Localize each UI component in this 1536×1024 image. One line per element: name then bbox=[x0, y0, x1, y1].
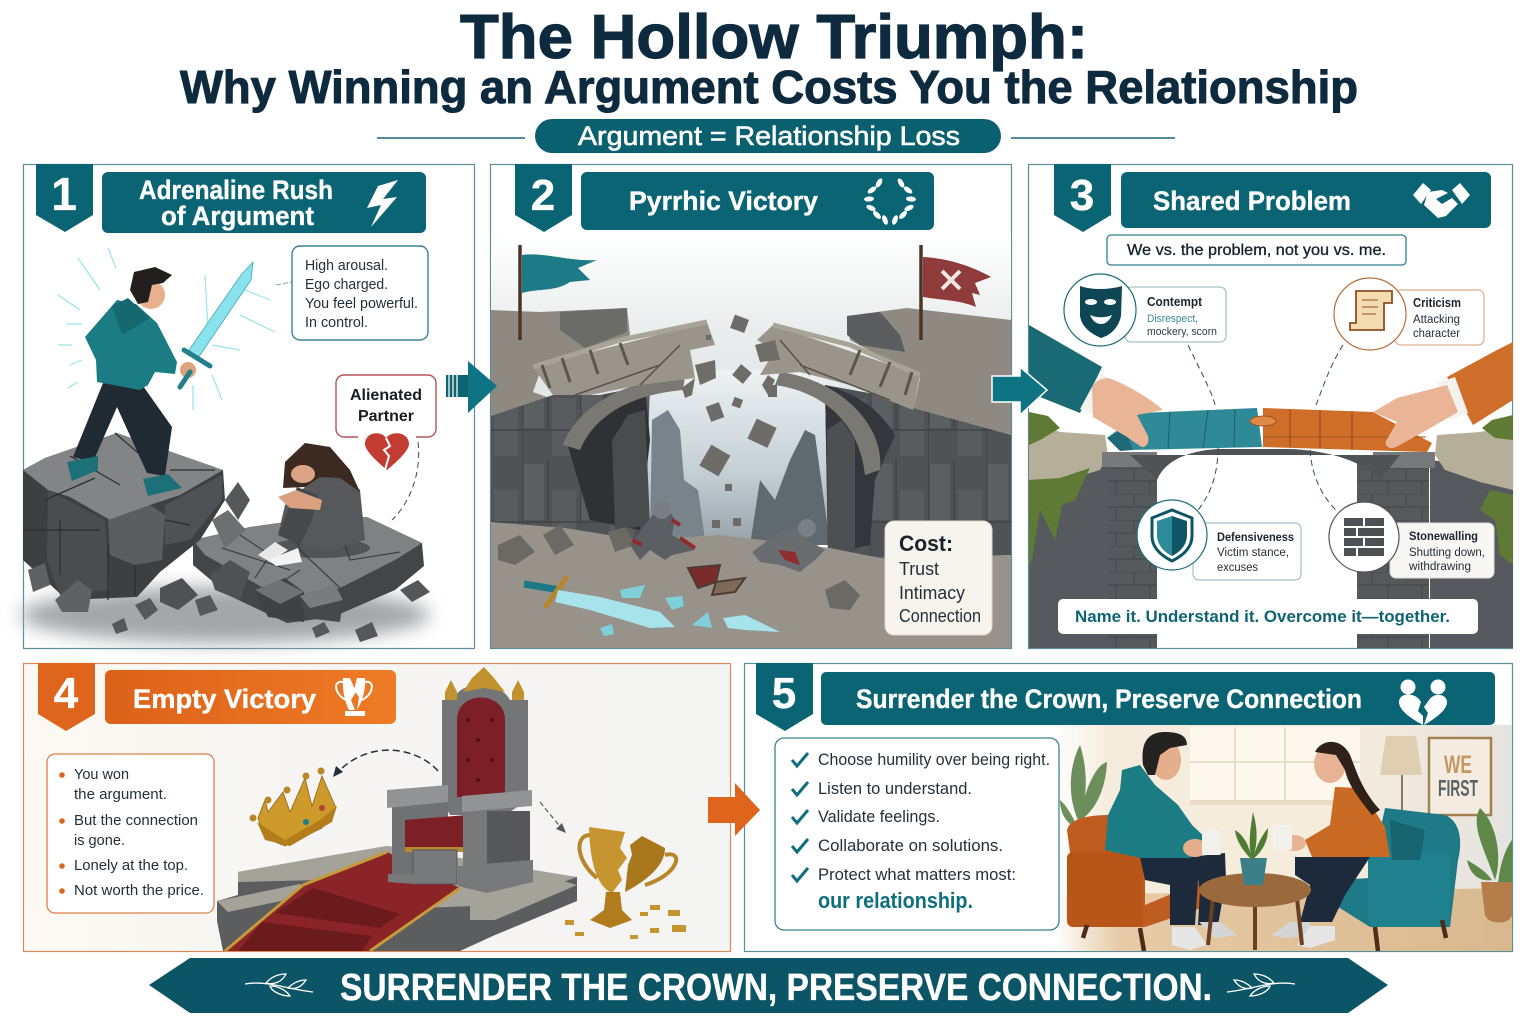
arrow: panel 2 to 3 bbox=[992, 367, 1047, 415]
callout: we vs the problem bbox=[1107, 235, 1406, 265]
callout: how winning feels bbox=[276, 246, 428, 340]
scene: rubble floor bbox=[491, 522, 1011, 648]
icon: lightning bolt bbox=[367, 180, 398, 227]
scene: seated woman bbox=[258, 443, 370, 566]
man seated bbox=[1105, 732, 1237, 950]
callout: how winning feels: High arousal. bbox=[305, 258, 388, 274]
man hoodie bbox=[85, 300, 177, 390]
man hoodie bbox=[1105, 765, 1210, 858]
card: contempt bbox=[1064, 274, 1226, 346]
card: list bbox=[47, 754, 214, 913]
equation pill bbox=[377, 119, 1175, 153]
card: criticism: character bbox=[1413, 328, 1460, 340]
arrows: dashed bbox=[333, 750, 566, 833]
card: list: the argument. bbox=[74, 787, 167, 803]
icon: fallen crown bbox=[250, 768, 337, 846]
card: stonewalling: Stonewalling bbox=[1409, 529, 1478, 543]
panel 4 heading: Empty Victory bbox=[133, 684, 316, 714]
panel 4: empty victory bbox=[24, 663, 730, 952]
card: list: But the connection bbox=[74, 813, 198, 829]
throne body bbox=[483, 811, 530, 864]
scene: shattered sword bbox=[524, 578, 780, 636]
scene: rubble bbox=[112, 580, 430, 642]
card: defensiveness: excuses bbox=[1217, 562, 1258, 574]
scene: left rock wall bbox=[491, 385, 650, 545]
scene: scattered blocks bbox=[498, 525, 860, 610]
panel 3 badge: 3 bbox=[1070, 171, 1094, 220]
arrow: panel 1 to 2 bbox=[446, 361, 497, 413]
callout: how winning feels: You feel powerful. bbox=[305, 296, 418, 312]
throne gold crest bbox=[463, 667, 505, 692]
equation pill: Argument = Relationship Loss bbox=[578, 121, 960, 151]
scene: falling debris bbox=[699, 315, 777, 552]
woman's mug bbox=[1273, 825, 1292, 850]
card: list: You won bbox=[74, 767, 129, 783]
card: criticism: Criticism bbox=[1413, 296, 1461, 310]
scene: teal puzzle plank bbox=[1107, 408, 1262, 451]
man's mug bbox=[1202, 830, 1221, 855]
card: criticism: Attacking bbox=[1413, 314, 1460, 326]
teal armchair bbox=[1335, 808, 1460, 951]
callout: cost: Cost: bbox=[899, 531, 953, 556]
panel 3 badge bbox=[1054, 164, 1111, 232]
arrow: panel 4 to 5 bbox=[708, 783, 760, 836]
icon: scroll bbox=[1350, 291, 1392, 330]
right plant bbox=[1467, 808, 1512, 922]
scene: high stone pedestal bbox=[23, 433, 250, 612]
icon: mask bbox=[1080, 286, 1122, 338]
man head and hair bbox=[137, 281, 165, 309]
title bbox=[180, 3, 1358, 113]
scene: right arch ring bbox=[775, 372, 880, 475]
panel 5 heading bbox=[821, 672, 1495, 725]
card: criticism bbox=[1334, 278, 1484, 350]
panel 2 badge: 2 bbox=[531, 171, 555, 220]
icon: handshake bbox=[1413, 183, 1470, 218]
scene: energy sparks bbox=[58, 248, 275, 410]
scene: right cliff bbox=[1357, 415, 1513, 648]
scene: left cliff bbox=[1029, 412, 1157, 648]
card: list: is gone. bbox=[74, 833, 125, 849]
callout: cost: Intimacy bbox=[899, 583, 965, 603]
panel 1 badge: 1 bbox=[51, 168, 77, 220]
scene: throne steps bbox=[217, 846, 577, 951]
woman's head and hair bbox=[1314, 752, 1345, 783]
man legs bbox=[1140, 853, 1226, 925]
panel 2: pyrrhic victory bbox=[490, 164, 1012, 648]
wall art: we first: WE bbox=[1444, 751, 1472, 779]
scene: left arch ring bbox=[563, 376, 685, 450]
card: defensiveness bbox=[1137, 500, 1301, 580]
subtitle: Why Winning an Argument Costs You the Relationship bbox=[180, 61, 1358, 113]
card: advice list: Validate feelings. bbox=[818, 808, 940, 826]
panel 5 badge: 5 bbox=[772, 669, 796, 718]
man legs bbox=[73, 383, 172, 476]
throne back bbox=[442, 685, 528, 815]
card: advice list: Choose humility over being right. bbox=[818, 751, 1050, 769]
card: defensiveness: Defensiveness bbox=[1217, 530, 1294, 544]
panel 5 badge bbox=[756, 663, 813, 731]
scene: right rock wall bbox=[825, 385, 1011, 560]
panel 3 heading: Shared Problem bbox=[1153, 186, 1351, 216]
icon: right sprig bbox=[1227, 974, 1295, 996]
wall art: we first bbox=[1429, 738, 1491, 815]
panel 4 badge: 4 bbox=[54, 669, 79, 718]
card: stonewalling bbox=[1329, 502, 1494, 578]
callout: name it: Name it. Understand it. Overcome it—together. bbox=[1075, 607, 1450, 626]
scene: stone arch bbox=[1130, 449, 1400, 480]
panel 5 heading: Surrender the Crown, Preserve Connection bbox=[856, 684, 1362, 714]
panel 2 heading bbox=[581, 172, 934, 230]
icon: cracked trophy bbox=[336, 678, 372, 716]
panel 1: adrenaline rush bbox=[20, 164, 474, 648]
scene: stone ground smudge bbox=[20, 587, 430, 643]
card: advice list: our relationship. bbox=[818, 888, 973, 913]
scene: man with sword bbox=[67, 262, 253, 496]
panel 2 heading: Pyrrhic Victory bbox=[629, 186, 818, 216]
scene: left cliff top bbox=[491, 308, 630, 420]
red carpet bbox=[225, 852, 460, 951]
callout: how winning feels: In control. bbox=[305, 315, 368, 331]
callout: alienated partner bbox=[336, 375, 436, 520]
lamp bbox=[1380, 736, 1422, 810]
man head bbox=[1155, 746, 1181, 780]
panel 3 heading bbox=[1121, 172, 1491, 228]
card: list: Lonely at the top. bbox=[74, 858, 188, 874]
woman's sweater bbox=[1305, 787, 1390, 857]
wall art: we first: FIRST bbox=[1438, 775, 1478, 801]
scene: fallen soldiers bbox=[630, 501, 825, 572]
callout: we vs the problem: We vs. the problem, not you vs. me. bbox=[1127, 242, 1386, 259]
callout: how winning feels: Ego charged. bbox=[305, 277, 388, 293]
icon: shield bbox=[1152, 510, 1192, 561]
panel 5: surrender the crown bbox=[744, 663, 1512, 952]
scene: broken right bridge deck bbox=[755, 325, 920, 410]
card: advice list: Protect what matters most: bbox=[818, 866, 1016, 884]
panel 1 badge bbox=[36, 164, 93, 232]
card: advice list: Collaborate on solutions. bbox=[818, 837, 1003, 855]
panel 4 badge bbox=[38, 663, 95, 731]
card: contempt: mockery, scorn bbox=[1147, 326, 1217, 338]
callout: alienated partner: Partner bbox=[358, 408, 414, 425]
scene: valley gap bbox=[630, 370, 840, 545]
card: advice list: Listen to understand. bbox=[818, 780, 972, 798]
man shoes bbox=[67, 456, 98, 481]
scene: orange puzzle plank bbox=[1250, 408, 1432, 452]
closing banner: SURRENDER THE CROWN, PRESERVE CONNECTION. bbox=[340, 967, 1212, 1009]
man's shoes bbox=[1172, 927, 1207, 950]
connector lines bbox=[1188, 345, 1343, 512]
card: advice list bbox=[775, 738, 1059, 930]
icon: brick wall bbox=[1344, 518, 1384, 556]
coffee table with plant bbox=[1199, 812, 1311, 950]
scene: lower cracked platform bbox=[193, 517, 424, 623]
panel 1 heading: Adrenaline Rush bbox=[139, 175, 333, 205]
icon: left sprig bbox=[245, 974, 313, 996]
callout: cost: Connection bbox=[899, 606, 981, 626]
left plant bbox=[1060, 745, 1107, 828]
icon: teal flag bbox=[520, 245, 597, 340]
callout: name it bbox=[1058, 599, 1478, 634]
panel 4 heading bbox=[105, 670, 396, 724]
panel 2 badge bbox=[515, 164, 572, 232]
panel 3: shared problem bbox=[1028, 164, 1513, 648]
icon: red flag bbox=[921, 245, 991, 340]
scene: living room bbox=[1055, 725, 1512, 951]
card: contempt: Contempt bbox=[1147, 295, 1203, 309]
icon: broken heart bbox=[365, 433, 409, 470]
woman's shoes bbox=[1272, 922, 1310, 938]
scene: stone throne bbox=[387, 667, 533, 893]
scene: left hand and sleeve bbox=[1029, 325, 1163, 447]
scene: right hand and sleeve bbox=[1373, 342, 1513, 448]
closing banner bbox=[149, 958, 1388, 1013]
card: list: Not worth the price. bbox=[74, 883, 204, 899]
main heading: The Hollow Triumph: bbox=[460, 3, 1088, 72]
panel 1 heading: of Argument bbox=[161, 201, 314, 231]
icon: laurel wreath bbox=[864, 177, 916, 226]
woman seated bbox=[1272, 742, 1390, 948]
scene: misty sky bbox=[491, 235, 1011, 435]
woman's legs bbox=[1295, 857, 1370, 922]
callout: alienated partner: Alienated bbox=[350, 387, 422, 404]
orange armchair bbox=[1067, 815, 1210, 951]
panel 1 heading bbox=[102, 172, 426, 233]
glowing sword bbox=[189, 262, 253, 358]
scene: right cliff top bbox=[847, 308, 1011, 440]
card: stonewalling: Shutting down, bbox=[1409, 547, 1485, 559]
icon: broken trophy bbox=[565, 827, 686, 939]
scene: distant spires bbox=[650, 410, 830, 545]
icon: two people broken heart bbox=[1399, 680, 1447, 725]
callout: cost bbox=[885, 521, 992, 635]
scene: broken left bridge deck bbox=[533, 322, 716, 398]
scene: broken shield bbox=[688, 565, 745, 595]
card: stonewalling: withdrawing bbox=[1408, 561, 1471, 573]
card: contempt: Disrespect, bbox=[1147, 313, 1198, 325]
callout: cost: Trust bbox=[899, 559, 939, 579]
card: defensiveness: Victim stance, bbox=[1217, 547, 1289, 559]
